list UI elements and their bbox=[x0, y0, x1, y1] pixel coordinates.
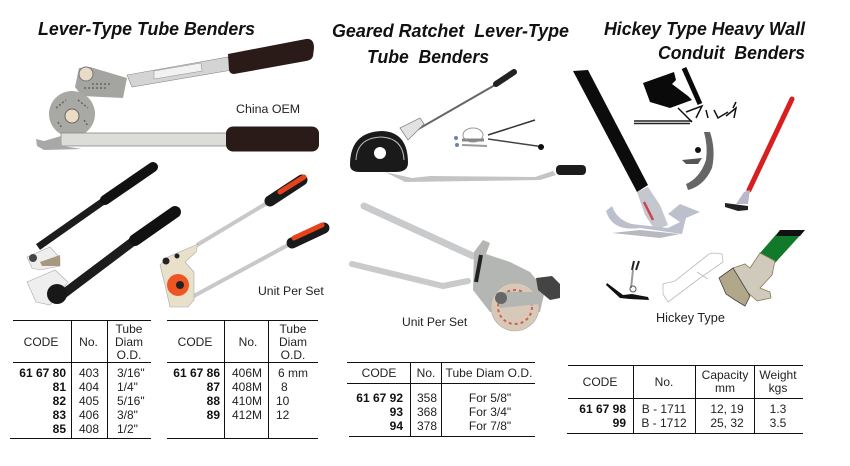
icon: green handle hickey bbox=[719, 230, 805, 306]
table: 61 67 98 to 99: 12, 19 bbox=[710, 402, 744, 416]
table: 61 67 86 to 89: 408M bbox=[232, 380, 262, 394]
label: hickey type: Hickey Type bbox=[656, 311, 725, 325]
heading: hickey type: Hickey Type Heavy Wall bbox=[604, 18, 806, 39]
icon: red grip bender bbox=[160, 177, 324, 307]
table: 61 67 92 to 94: For 5/8" bbox=[469, 391, 511, 405]
table: 61 67 86 to 89: 88 bbox=[207, 394, 220, 408]
table: 61 67 98 to 99 bbox=[567, 365, 803, 434]
table: 61 67 86 to 89: Tube bbox=[280, 322, 307, 336]
table: 61 67 86 to 89: O.D. bbox=[281, 348, 305, 362]
table: 61 67 98 to 99: mm bbox=[715, 381, 735, 395]
table: 61 67 80 to 85: 82 bbox=[53, 394, 66, 408]
icon: black handled bender bbox=[573, 70, 700, 238]
heading: hickey type bbox=[604, 18, 806, 63]
table: 61 67 92 to 94: CODE bbox=[362, 366, 396, 380]
icon: small hickey bbox=[606, 261, 649, 300]
table: 61 67 98 to 99: Capacity bbox=[702, 368, 748, 382]
icon: small ratchet bender bbox=[454, 120, 544, 150]
table: 61 67 98 to 99: B - 1712 bbox=[641, 416, 687, 430]
table: 61 67 86 to 89: 10 bbox=[276, 394, 290, 408]
table: 61 67 92 to 94: No. bbox=[417, 366, 435, 380]
table: 61 67 98 to 99: 99 bbox=[613, 416, 626, 430]
icon: chrome lever bender bbox=[36, 39, 319, 152]
table: 61 67 80 to 85: 83 bbox=[53, 408, 66, 422]
table: 61 67 80 to 85: 404 bbox=[79, 380, 99, 394]
table: 61 67 92 to 94: For 3/4" bbox=[469, 405, 511, 419]
table: 61 67 92 to 94 bbox=[347, 362, 535, 436]
table: 61 67 98 to 99: No. bbox=[655, 375, 673, 389]
table: 61 67 86 to 89: 61 67 86 bbox=[173, 366, 220, 380]
heading: hickey type: Conduit Benders bbox=[658, 42, 805, 63]
table: 61 67 86 to 89 bbox=[167, 320, 318, 438]
table: 61 67 86 to 89: 6 mm bbox=[278, 366, 308, 380]
table: 61 67 80 to 85: 1/4" bbox=[117, 380, 138, 394]
table: 61 67 92 to 94: 378 bbox=[417, 419, 437, 433]
label: china oem: China OEM bbox=[236, 102, 300, 116]
heading: geared ratchet bbox=[332, 20, 569, 67]
table: 61 67 92 to 94: 93 bbox=[390, 405, 403, 419]
icon: hickey line drawing bbox=[663, 253, 723, 302]
table: 61 67 86 to 89: 8 bbox=[281, 380, 288, 394]
panel: lever-type tube benders bbox=[27, 18, 324, 307]
table: 61 67 86 to 89: 412M bbox=[232, 408, 262, 422]
table: 61 67 92 to 94: 358 bbox=[417, 391, 437, 405]
table: 61 67 86 to 89: 89 bbox=[207, 408, 220, 422]
icon: geared ratchet bender bbox=[350, 72, 586, 182]
table: 61 67 80 to 85: 3/8" bbox=[117, 408, 138, 422]
table: 61 67 80 to 85: 61 67 80 bbox=[19, 366, 66, 380]
label: unit per set: Unit Per Set bbox=[402, 315, 468, 329]
panel: geared ratchet lever-type tube benders bbox=[332, 20, 586, 331]
table: 61 67 80 to 85: 81 bbox=[53, 380, 66, 394]
table: 61 67 98 to 99: 1.3 bbox=[770, 402, 787, 416]
icon: red handled bender bbox=[725, 99, 792, 211]
heading: geared ratchet: Geared Ratchet Lever-Type bbox=[332, 20, 569, 41]
icon: black bender bbox=[27, 167, 175, 305]
table: 61 67 80 to 85: 403 bbox=[79, 366, 99, 380]
table: 61 67 98 to 99: CODE bbox=[583, 375, 617, 389]
table: 61 67 86 to 89: 410M bbox=[232, 394, 262, 408]
heading: geared ratchet: Tube Benders bbox=[367, 46, 489, 67]
table: 61 67 80 to 85: O.D. bbox=[117, 348, 141, 362]
table: 61 67 86 to 89: Diam bbox=[279, 335, 307, 349]
table: 61 67 92 to 94: 61 67 92 bbox=[356, 391, 403, 405]
table: 61 67 80 to 85: 405 bbox=[79, 394, 99, 408]
table: 61 67 92 to 94: 94 bbox=[390, 419, 403, 433]
table: 61 67 98 to 99: B - 1711 bbox=[642, 402, 687, 416]
table: 61 67 80 to 85: 408 bbox=[79, 422, 99, 436]
table: 61 67 98 to 99: Weight bbox=[759, 368, 797, 382]
panel: hickey type heavy wall conduit benders bbox=[573, 18, 806, 325]
table: 61 67 98 to 99: 3.5 bbox=[770, 416, 787, 430]
table: 61 67 98 to 99: 61 67 98 bbox=[579, 402, 626, 416]
table: 61 67 98 to 99: kgs bbox=[769, 381, 787, 395]
label: unit per set: Unit Per Set bbox=[258, 284, 324, 298]
table: 61 67 86 to 89: 87 bbox=[207, 380, 220, 394]
table: 61 67 92 to 94: 368 bbox=[417, 405, 437, 419]
table: 61 67 86 to 89: No. bbox=[239, 335, 257, 349]
table: 61 67 86 to 89: CODE bbox=[178, 335, 212, 349]
table: 61 67 80 to 85: 3/16" bbox=[117, 366, 145, 380]
heading: lever-type: Lever-Type Tube Benders bbox=[38, 18, 255, 39]
table: 61 67 98 to 99: 25, 32 bbox=[710, 416, 744, 430]
table: 61 67 86 to 89: 406M bbox=[232, 366, 262, 380]
table: 61 67 80 to 85: 406 bbox=[79, 408, 99, 422]
icon: curved shoe bbox=[682, 132, 714, 190]
icon: installation sketch bbox=[634, 68, 736, 124]
table: 61 67 80 to 85: 1/2" bbox=[117, 422, 138, 436]
table: 61 67 92 to 94: Tube Diam O.D. bbox=[446, 366, 532, 380]
table: 61 67 80 to 85: CODE bbox=[24, 335, 58, 349]
table: 61 67 86 to 89: 12 bbox=[276, 408, 290, 422]
table: 61 67 80 to 85: Diam bbox=[115, 335, 143, 349]
table: 61 67 80 to 85: 5/16" bbox=[117, 394, 145, 408]
icon: grey hand bender bbox=[352, 206, 560, 331]
table: 61 67 80 to 85 bbox=[10, 320, 151, 438]
table: 61 67 80 to 85: No. bbox=[79, 335, 98, 349]
table: 61 67 92 to 94: For 7/8" bbox=[469, 419, 511, 433]
table: 61 67 80 to 85: Tube bbox=[116, 322, 143, 336]
table: 61 67 80 to 85: 85 bbox=[53, 422, 66, 436]
